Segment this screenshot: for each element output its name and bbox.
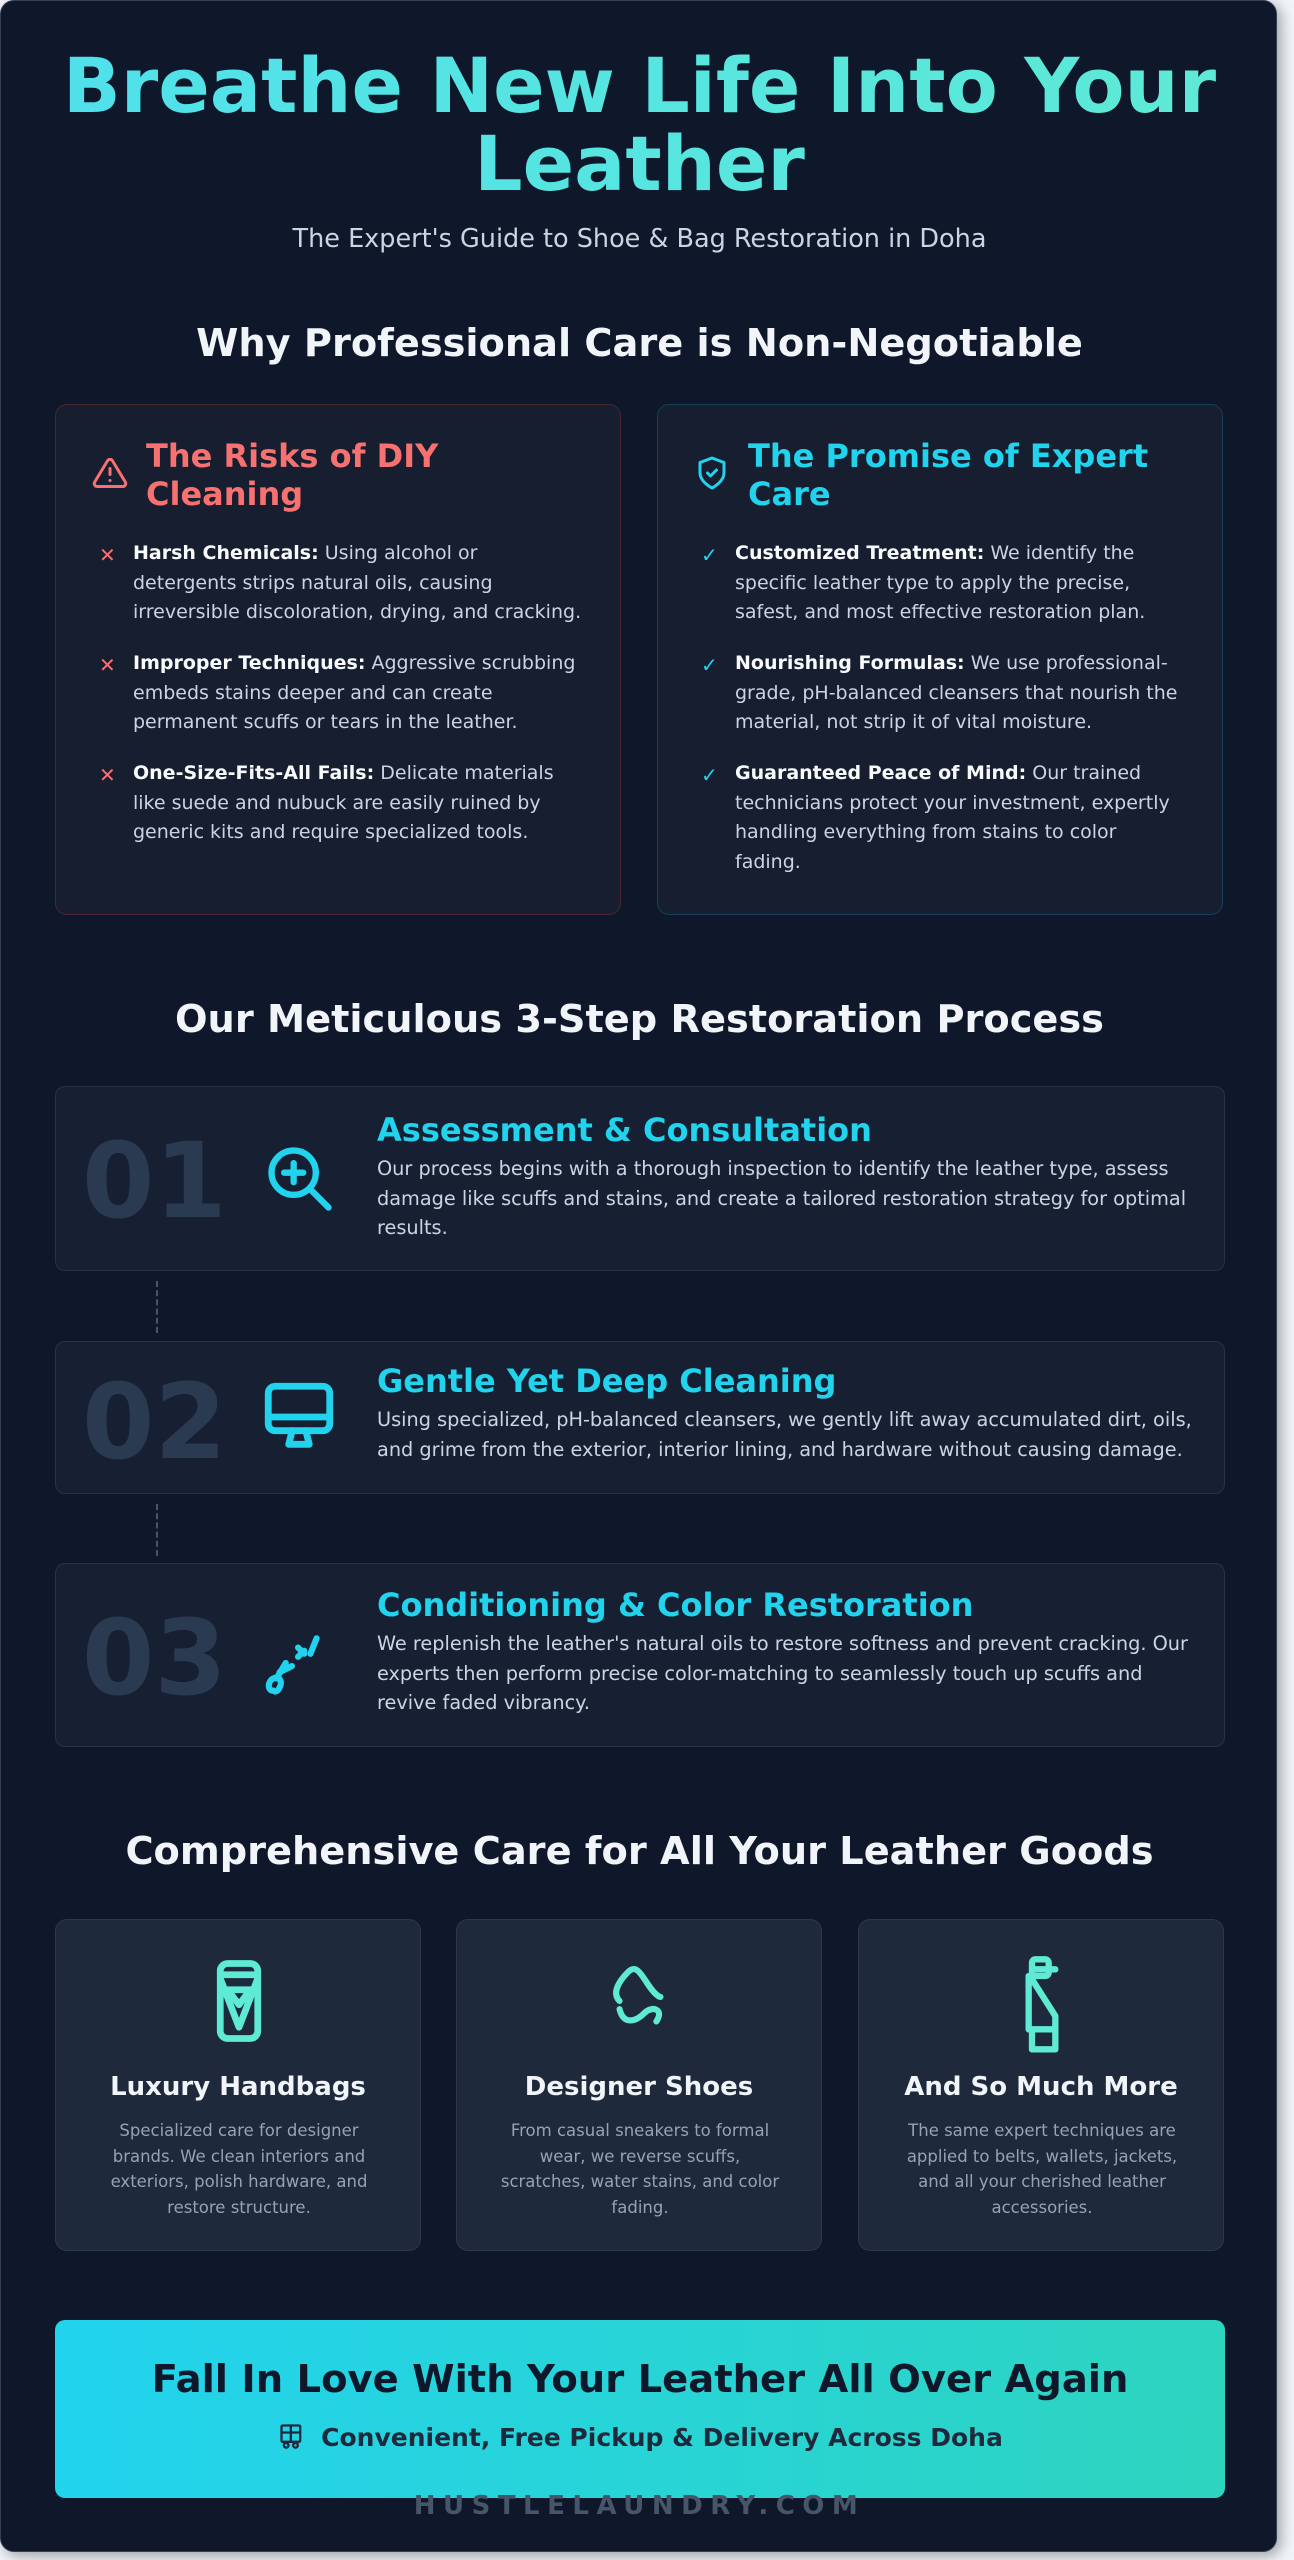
title: Breathe New Life Into Your [63,41,1216,130]
icon: shield [698,456,726,490]
promise item 3 [701,762,1170,872]
heading: process: Our Meticulous 3-Step Restoration Process [175,997,1104,1042]
panel: risks: ✕ [99,763,116,787]
promise item 2: Nourishing Formulas: We use professional- [735,652,1168,674]
step 3 [55,1563,1225,1747]
card: more [858,1919,1224,2251]
card: handbags [55,1919,421,2251]
icon: handbag [216,1960,262,2042]
step 1 [55,1086,1225,1271]
promise item 2: material, not strip it of vital moisture. [735,711,1092,733]
panel: risks: ✕ [99,543,116,567]
card: handbags: Luxury Handbags [110,2072,366,2102]
promise item 1: safest, and most effective restoration plan. [735,601,1145,623]
risk item 2: Improper Techniques: Aggressive scrubbing [133,652,575,674]
panel: promise: ✓ [701,763,718,787]
card: shoes [456,1919,822,2251]
footer brand: HUSTLELAUNDRY.COM [414,2491,865,2521]
panel: promise: ✓ [701,543,718,567]
step 3: revive faded vibrancy. [377,1691,590,1714]
risk item 3: generic kits and require specialized tools. [133,821,528,843]
promise heading: Care [748,475,831,513]
card: more: The same expert techniques are applied to belts, wallets, jackets, and all your cherished leather accessories. [907,2121,1177,2216]
risks heading: The Risks of DIY [146,437,438,475]
panel: risks [55,404,621,915]
promise heading: The Promise of Expert [748,437,1148,475]
step 2: Gentle Yet Deep Cleaning [377,1362,836,1400]
card: shoes: Designer Shoes [525,2072,753,2102]
icon: monitor [264,1382,334,1448]
step 1: results. [377,1216,448,1239]
risk item 1: Harsh Chemicals: Using alcohol or [133,542,477,564]
step 1: damage like scuffs and stains, and create a tailored restoration strategy for optimal [377,1186,1186,1210]
promise item 1 [701,542,1145,623]
icon: bottle [1026,1956,1058,2052]
icon: warning [92,458,128,488]
promise item 3: fading. [735,850,801,872]
CTA banner [55,2320,1225,2498]
step 3: experts then perform precise color-matching to seamlessly touch up scuffs and [377,1662,1142,1684]
step 1: Our process begins with a thorough inspection to identify the leather type, assess [377,1157,1169,1180]
heading: why professional: Why Professional Care is Non-Negotiable [196,321,1083,366]
risk item 3: like suede and nubuck are easily ruined by [133,792,541,814]
promise heading [748,437,1148,513]
card: shoes: From casual sneakers to formal wear, we reverse scuffs, scratches, water stains, and color fading. [501,2121,779,2216]
promise item 2 [701,652,1177,733]
step 2: and grime from the exterior, interior lining, and hardware without causing damage. [377,1438,1183,1460]
promise item 2: grade, pH-balanced cleansers that nourish the [735,682,1177,704]
risk item 2 [99,652,575,733]
panel: promise [657,404,1223,915]
CTA heading: Fall In Love With Your Leather All Over Again [152,2357,1128,2402]
step 3: 03 [82,1597,227,1719]
title [1,47,1278,203]
heading: comprehensive care: Comprehensive Care for All Your Leather Goods [125,1829,1154,1874]
step 3: Conditioning & Color Restoration [377,1586,973,1624]
step 2: Using specialized, pH-balanced cleansers, we gently lift away accumulated dirt, oils, [377,1408,1192,1431]
step 2 [55,1341,1225,1494]
subtitle: The Expert's Guide to Shoe & Bag Restoration in Doha [293,224,986,254]
risk item 1 [99,542,581,623]
promise item 1: Customized Treatment: We identify the [735,542,1134,564]
icon: brush [266,1635,320,1695]
step 1: 01 [82,1120,227,1242]
risk item 2: embeds stains deeper and can create [133,682,493,704]
title: Leather [474,119,805,208]
risk item 1: irreversible discoloration, drying, and cracking. [133,601,581,623]
risk item 2: permanent scuffs or tears in the leather. [133,711,518,733]
risk item 3: One-Size-Fits-All Fails: Delicate materials [133,762,554,784]
risk item 1: detergents strips natural oils, causing [133,572,493,594]
panel: risks: ✕ [99,653,116,677]
icon: shoe [613,1966,664,2024]
promise item 1: specific leather type to apply the precise, [735,572,1130,594]
promise item 3: handling everything from stains to color [735,821,1116,843]
promise item 3: Guaranteed Peace of Mind: Our trained [735,762,1141,784]
icon: magnifier [268,1147,332,1211]
card: handbags: Specialized care for designer brands. We clean interiors and exteriors, polish hardware, and restore structure. [111,2121,367,2216]
risks heading: Cleaning [146,475,303,513]
promise item 3: technicians protect your investment, expertly [735,792,1170,814]
step 3: We replenish the leather's natural oils to restore softness and prevent cracking. Our [377,1632,1188,1655]
risk item 3 [99,762,554,843]
risks heading [146,437,439,513]
card: more: And So Much More [904,2072,1178,2102]
step 2: 02 [82,1361,227,1483]
panel: promise: ✓ [701,653,718,677]
CTA subline with truck icon: Convenient, Free Pickup & Delivery Across Doha [321,2423,1003,2452]
step 1: Assessment & Consultation [377,1111,872,1149]
